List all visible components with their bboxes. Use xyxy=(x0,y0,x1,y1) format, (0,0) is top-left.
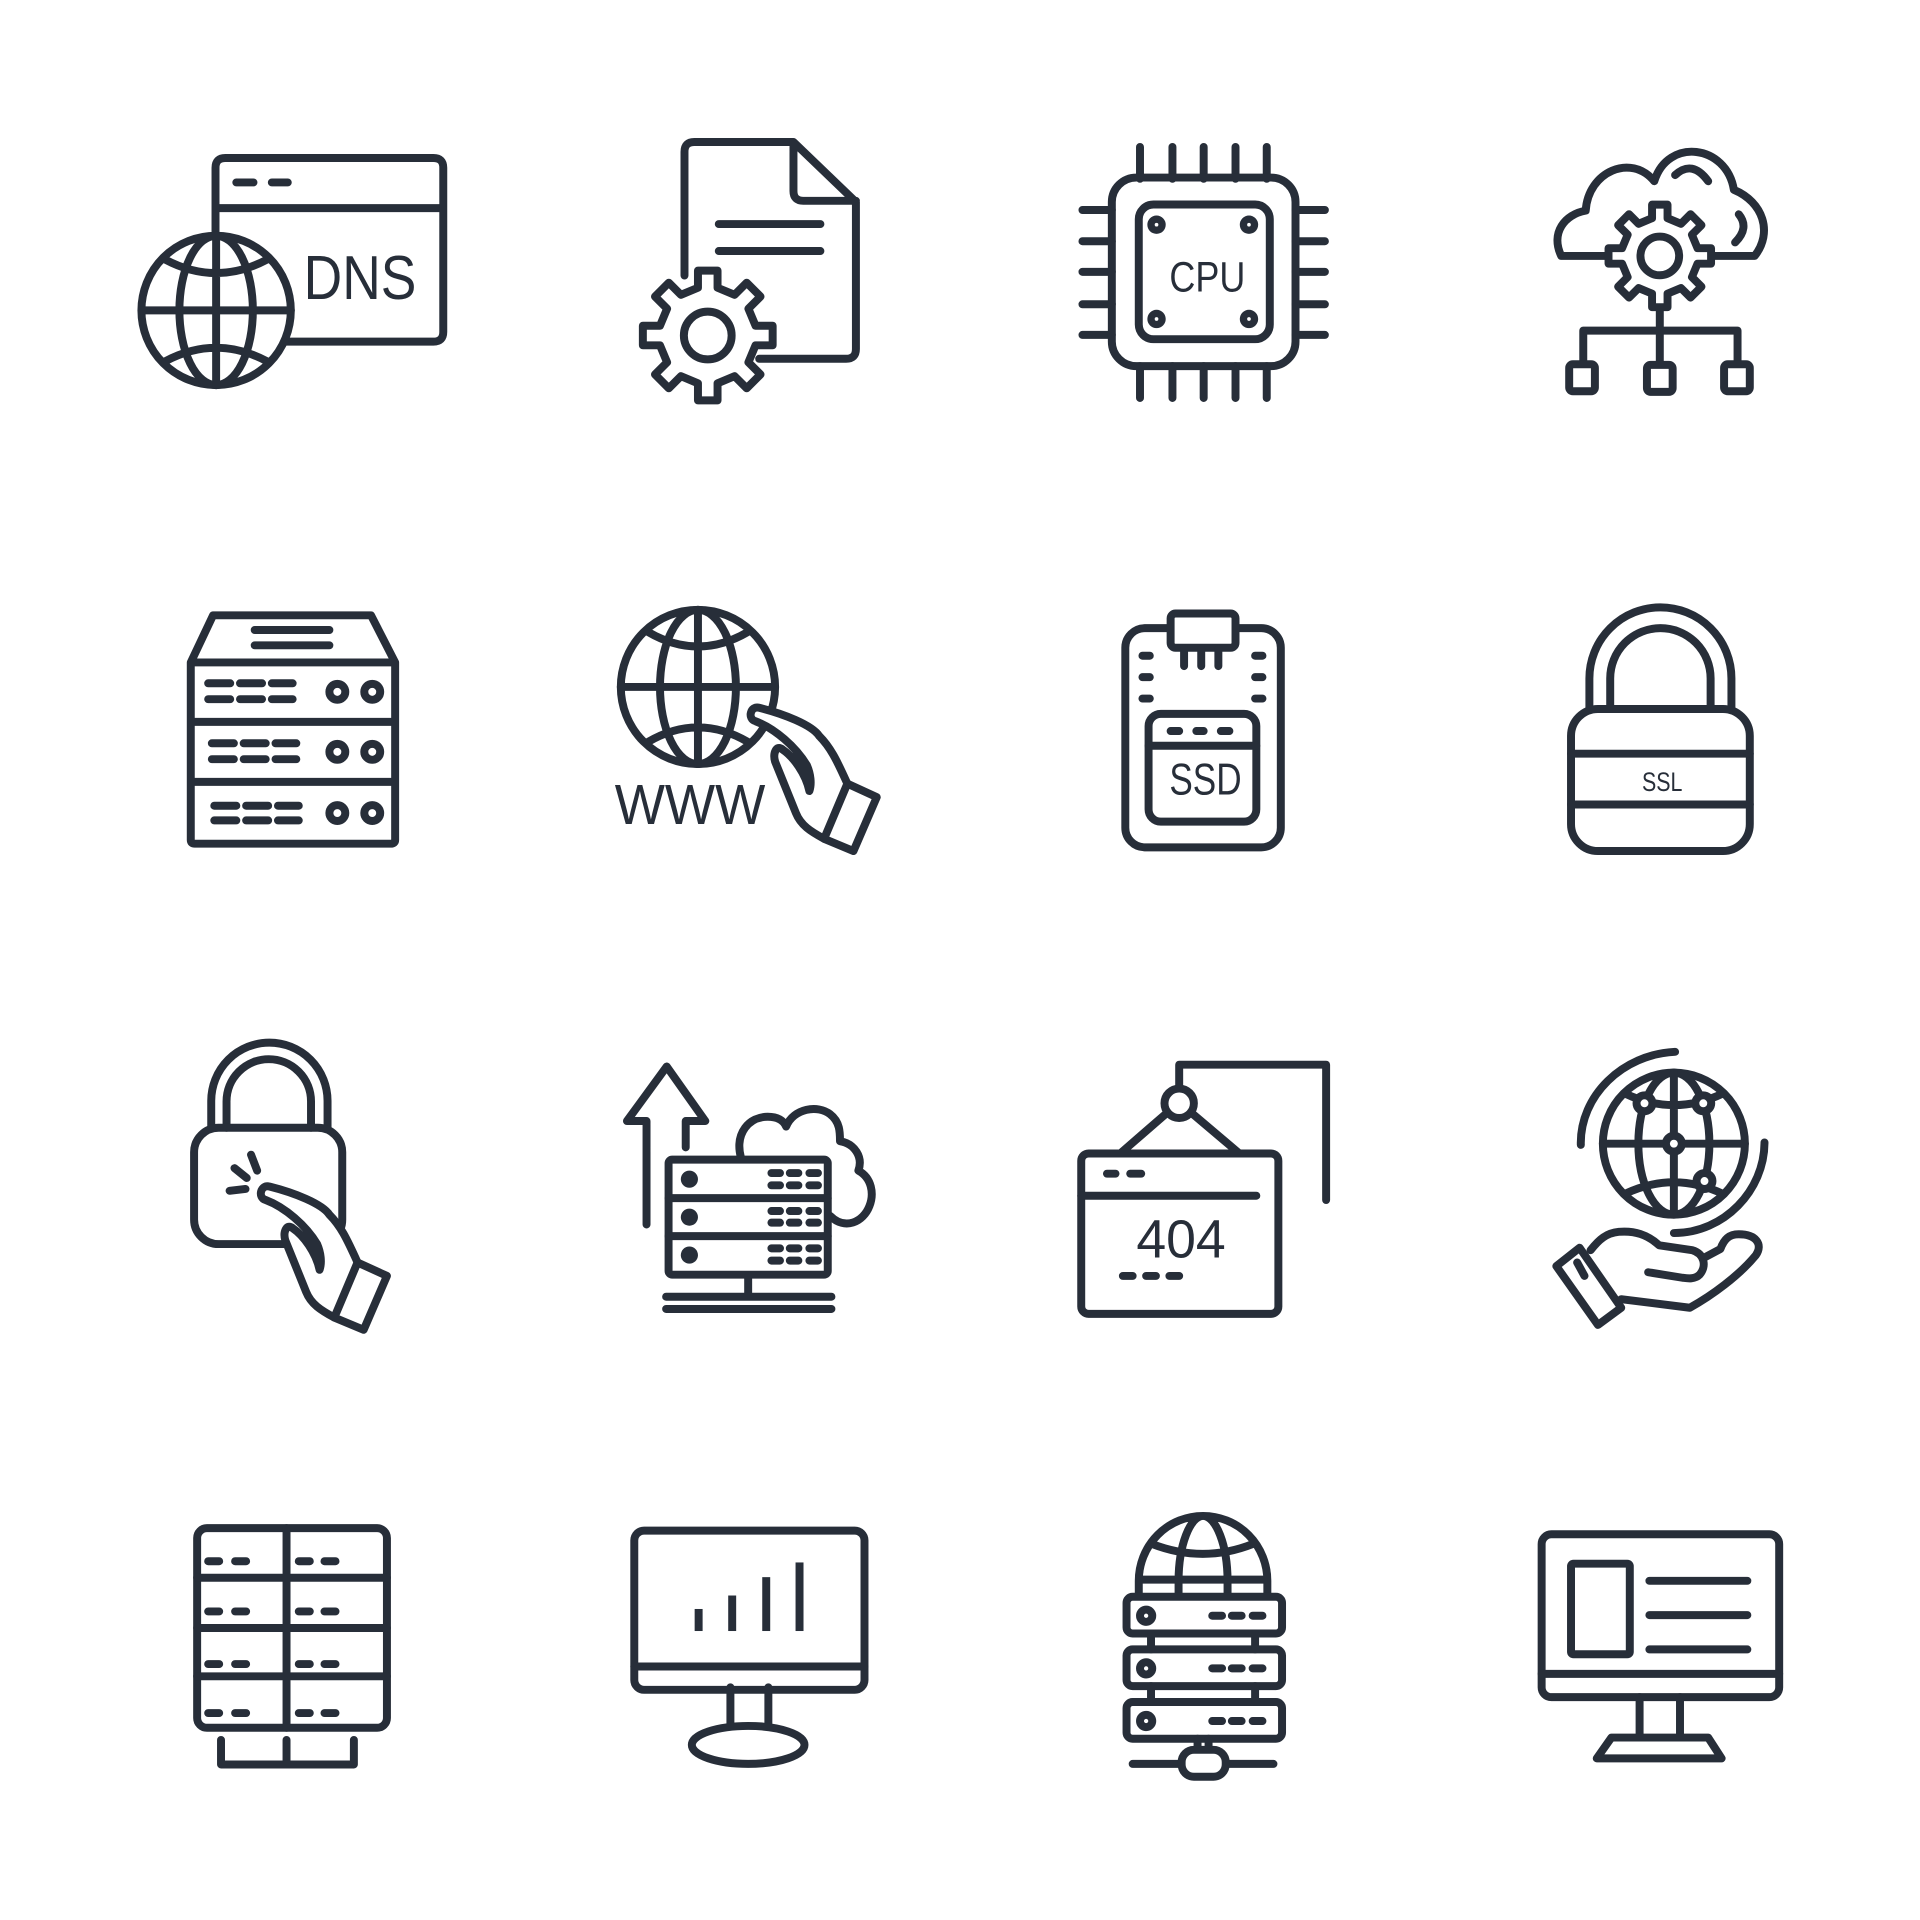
connector chip xyxy=(1171,613,1236,648)
label: WWW: WWW xyxy=(615,773,765,836)
icon: document with gear xyxy=(643,142,856,400)
chip body xyxy=(1112,178,1296,366)
cloud xyxy=(1557,152,1764,256)
document page xyxy=(684,142,856,359)
icon: monitor with bar chart xyxy=(634,1531,864,1764)
browser window xyxy=(216,158,443,342)
globe xyxy=(621,610,775,764)
hand xyxy=(1556,1232,1759,1325)
chip pins and side pads xyxy=(1142,649,1262,699)
tap sparks xyxy=(230,1155,257,1191)
server units xyxy=(1127,1597,1282,1739)
icon: globe held in hand xyxy=(1556,1052,1764,1325)
monitor frame xyxy=(1542,1534,1779,1697)
monitor stand xyxy=(730,1687,768,1727)
rack connectors xyxy=(1151,1633,1255,1702)
globe dome xyxy=(1139,1516,1267,1593)
gear xyxy=(1609,205,1711,307)
cloud xyxy=(739,1109,872,1223)
rack housing xyxy=(191,615,395,844)
label: CPU: CPU xyxy=(1169,253,1245,301)
up arrow xyxy=(627,1067,705,1224)
monitor stand xyxy=(1640,1697,1680,1738)
globe xyxy=(1603,1073,1745,1215)
icon: SSD drive xyxy=(1125,613,1281,847)
hanger bracket xyxy=(1122,1065,1326,1200)
server stack xyxy=(669,1160,828,1275)
server dashes xyxy=(771,1173,818,1261)
shackle xyxy=(211,1043,328,1128)
label: SSD: SSD xyxy=(1169,756,1242,805)
network nodes xyxy=(1569,364,1750,392)
network nodes xyxy=(1637,1095,1712,1189)
icon: padlock touched by hand xyxy=(194,1043,387,1330)
icon: DNS browser and globe xyxy=(141,158,443,385)
shackle xyxy=(1589,607,1731,709)
drawer dashes xyxy=(208,1561,336,1713)
network connector xyxy=(1133,1739,1273,1764)
image placeholder xyxy=(1571,1564,1630,1654)
icon: cloud server upload xyxy=(627,1067,872,1309)
icon: monitor with web page xyxy=(1542,1534,1779,1758)
browser window xyxy=(1081,1153,1278,1314)
orbit arcs xyxy=(1581,1052,1764,1233)
status lights xyxy=(1140,1610,1152,1727)
label: SSL: SSL xyxy=(1642,767,1682,797)
icon: storage cabinet xyxy=(197,1528,387,1764)
SSD screen xyxy=(1149,714,1256,822)
gear xyxy=(643,271,773,400)
lock body xyxy=(194,1128,342,1244)
SSD board xyxy=(1125,628,1281,847)
label: DNS: DNS xyxy=(304,243,416,313)
text lines xyxy=(1649,1581,1747,1649)
hand xyxy=(751,707,877,851)
chip pins xyxy=(1082,147,1325,398)
icon: globe on server stack xyxy=(1127,1516,1282,1777)
icon: server rack xyxy=(191,615,395,844)
label: 404: 404 xyxy=(1136,1210,1226,1270)
icon: CPU chip xyxy=(1082,147,1325,398)
cabinet frame xyxy=(197,1528,387,1728)
globe xyxy=(141,236,291,385)
icon: cloud gear network xyxy=(1557,152,1764,392)
rack lights xyxy=(329,684,380,821)
monitor screen xyxy=(634,1531,864,1690)
monitor base xyxy=(1597,1738,1722,1758)
lock body xyxy=(1571,709,1750,851)
rack dashes xyxy=(208,683,299,820)
monitor base xyxy=(692,1726,804,1764)
icon: hanging 404 page xyxy=(1081,1065,1326,1314)
screws xyxy=(1147,216,1258,328)
icon: WWW globe and hand xyxy=(615,610,877,851)
icon: SSL padlock xyxy=(1571,607,1750,851)
cabinet base xyxy=(221,1740,354,1764)
server status dots xyxy=(681,1171,698,1264)
hanger knob xyxy=(1164,1089,1194,1118)
network tree xyxy=(1583,306,1738,364)
hand xyxy=(261,1186,387,1330)
server dashes xyxy=(1212,1616,1262,1721)
bar chart xyxy=(695,1562,804,1631)
